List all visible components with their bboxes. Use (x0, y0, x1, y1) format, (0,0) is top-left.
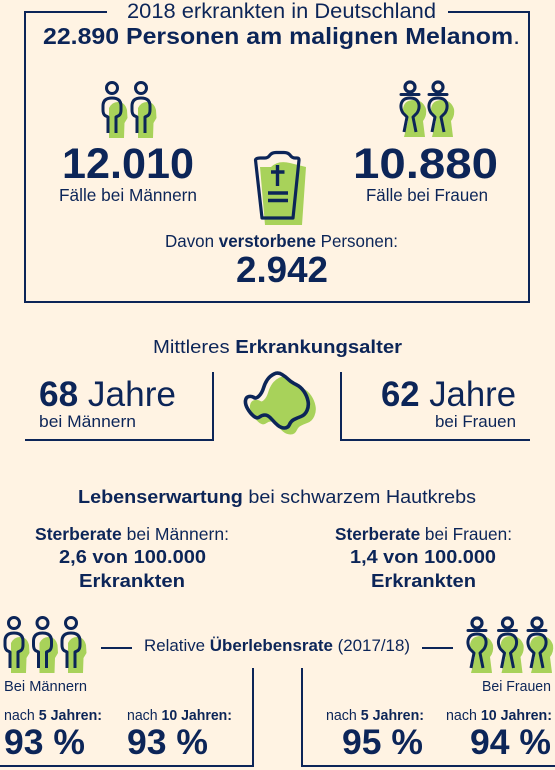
panel: 2018 cases (25, 0, 529, 302)
heading: total persons: 22.890 Personen am malignen Melanom . (43, 23, 520, 49)
icon: two women (401, 82, 454, 137)
heading: relative survival: Relative Überlebensrate (2017/18) (144, 636, 410, 655)
text block: mortality women: Erkrankten (371, 570, 476, 591)
text block: mortality men: Sterberate bei Männern: (35, 524, 229, 544)
text block: mortality men (35, 524, 229, 591)
panel: survival men (0, 668, 253, 766)
label: men: bei Männern (39, 413, 136, 431)
text block: mortality women (335, 524, 512, 591)
heading: median age: Mittleres Erkrankungsalter (153, 336, 402, 357)
label: women: bei Frauen (435, 413, 516, 431)
label: women: Bei Frauen (482, 678, 551, 695)
text block: mortality men: Erkrankten (79, 570, 185, 591)
icon: gravestone (256, 152, 306, 225)
text block: mortality men: 2,6 von 100.000 (59, 546, 206, 567)
number: cases in men: 12.010 (62, 140, 194, 188)
label: women after 5 years: nach 5 Jahren: (326, 707, 424, 724)
icon: skin patch (245, 373, 314, 433)
label: cases in men: Fälle bei Männern (59, 185, 197, 205)
heading: 2018 erkrankten: 2018 erkrankten in Deutschland (127, 0, 436, 23)
number: cases in women: 10.880 (353, 140, 498, 188)
icon: three men (5, 618, 86, 673)
text block: mortality women: 1,4 von 100.000 (350, 546, 496, 567)
number: 62 years: 62 Jahre (381, 375, 516, 414)
number: women after 10 years: 94 % (470, 723, 551, 762)
text: deceased persons: Davon verstorbene Personen: (165, 231, 398, 251)
label: men after 5 years: nach 5 Jahren: (4, 707, 102, 724)
icon: three women (468, 618, 553, 673)
number: 68 years: 68 Jahre (39, 375, 176, 414)
number: deceased persons: 2.942 (236, 249, 328, 290)
panel: age women (341, 372, 530, 440)
text block: mortality women: Sterberate bei Frauen: (335, 524, 512, 544)
icon: two men (103, 82, 156, 138)
number: men after 10 years: 93 % (127, 723, 208, 762)
number: women after 5 years: 95 % (342, 723, 423, 762)
panel: age men (25, 372, 213, 440)
label: cases in women: Fälle bei Frauen (366, 185, 488, 205)
number: men after 5 years: 93 % (4, 723, 85, 762)
heading: life expectancy: Lebenserwartung bei schwarzem Hautkrebs (78, 486, 476, 507)
panel: survival women (302, 668, 555, 766)
label: men after 10 years: nach 10 Jahren: (127, 707, 232, 724)
label: women after 10 years: nach 10 Jahren: (446, 707, 552, 724)
label: men: Bei Männern (4, 678, 87, 695)
